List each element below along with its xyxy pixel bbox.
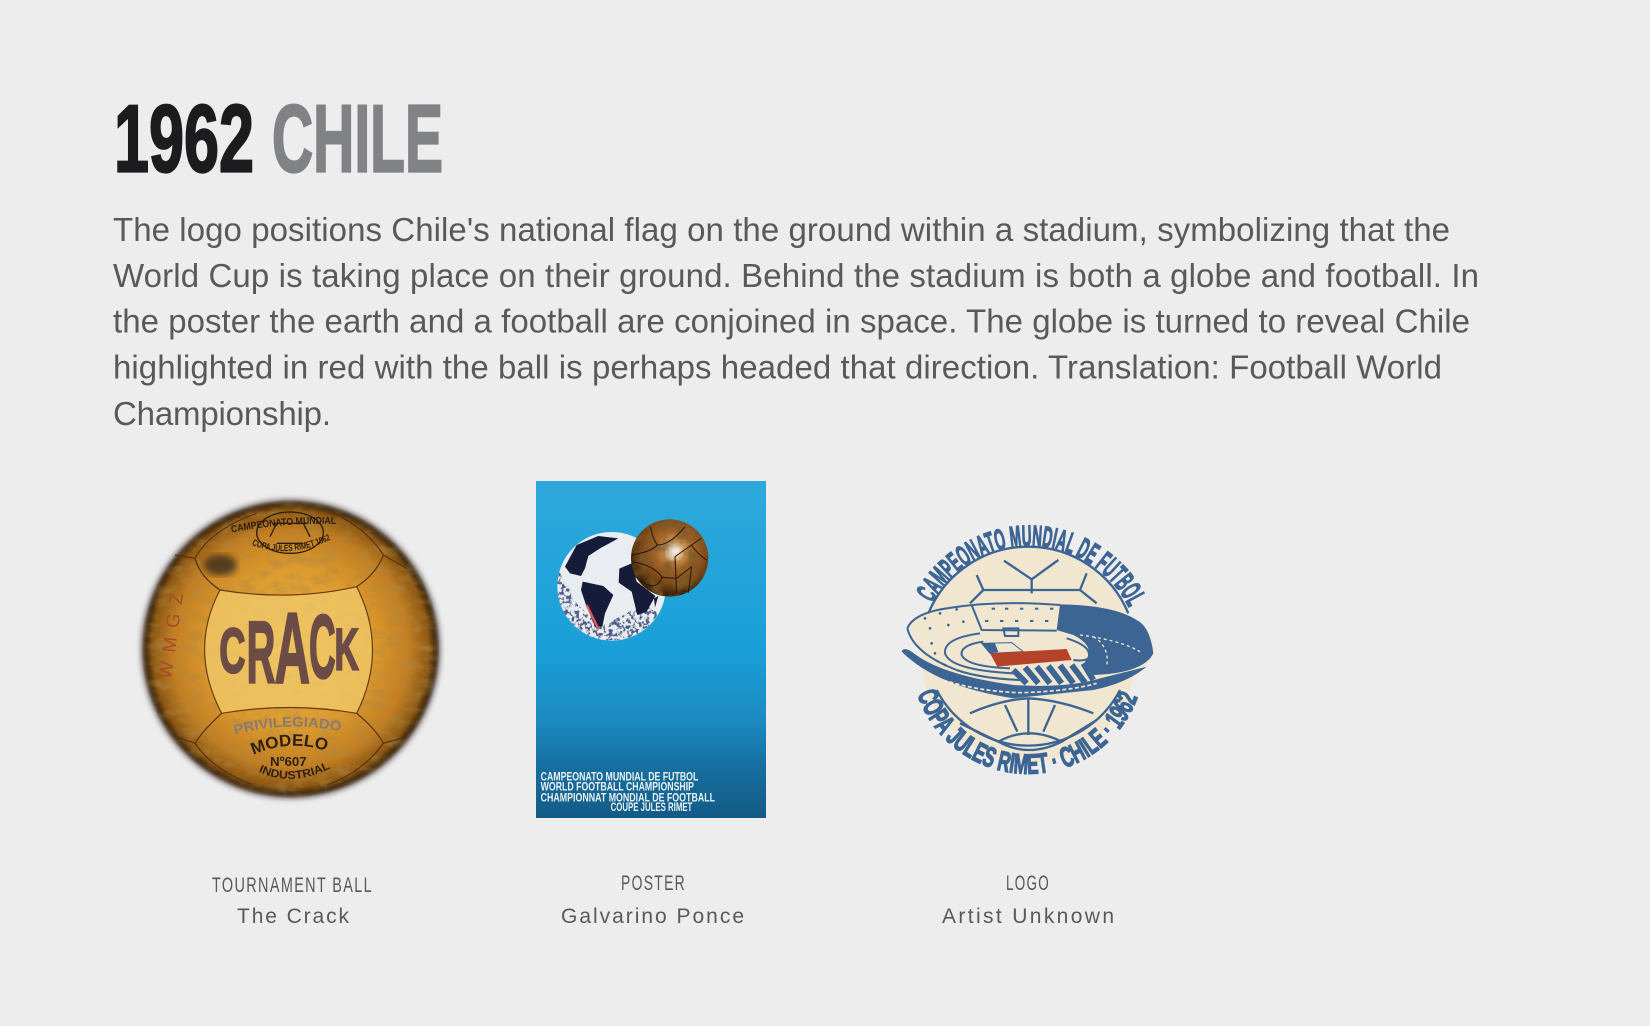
poster text: WORLD FOOTBALL CHAMPIONSHIP [541, 779, 694, 793]
logo stadium base ribbon [902, 649, 1147, 698]
caption: tournament ball [212, 874, 373, 928]
caption: logo: Artist Unknown [942, 905, 1114, 928]
description text block [113, 211, 1479, 432]
description text block: World Cup is taking place on their ground. Behind the stadium is both a globe and football. In [113, 257, 1479, 294]
logo cream ground [921, 548, 1136, 762]
ball bottom lettering: INDUSTRIAL [259, 763, 330, 779]
ball bottom lettering: PRIVILEGIADO [234, 716, 341, 734]
caption: logo: LOGO [1006, 872, 1050, 895]
title [114, 86, 443, 192]
title: CHILE [272, 86, 443, 192]
ball CRACK lettering: C [219, 617, 245, 687]
caption: tournament ball: The Crack [237, 905, 350, 928]
logo flag [982, 643, 1072, 667]
logo curved lettering: CAMPEONATO MUNDIAL DE FUTBOL [916, 524, 1145, 608]
logo stadium outline [907, 603, 1089, 680]
ball CRACK lettering: K [335, 617, 359, 682]
poster text: CHAMPIONNAT MONDIAL DE FOOTBALL [541, 790, 715, 804]
title: 1962 [114, 86, 254, 192]
description text block: Championship. [113, 395, 331, 432]
poster text [541, 770, 715, 814]
caption: logo [942, 872, 1114, 928]
description text block: the poster the earth and a football are conjoined in space. The globe is turned to reveal Chile [113, 302, 1470, 340]
infographic page: 1962 Chile [113, 103, 1477, 923]
poster text: CAMPEONATO MUNDIAL DE FUTBOL [541, 770, 698, 784]
ball CRACK lettering [219, 593, 359, 705]
ball bottom lettering [234, 716, 341, 779]
ball top lettering: CAMPEONATO MUNDIAL [231, 517, 336, 532]
logo stadium right stand [1057, 604, 1153, 675]
ball CRACK lettering: C [309, 598, 336, 698]
ball bottom lettering: MODELO [250, 734, 328, 754]
ball smudge [203, 554, 237, 576]
ball seams [175, 513, 407, 785]
logo curved lettering [916, 524, 1145, 775]
caption: poster: POSTER [621, 872, 686, 895]
caption: poster [561, 872, 744, 928]
caption: poster: Galvarino Ponce [561, 905, 744, 928]
logo seating dots [924, 608, 1053, 666]
description text block: highlighted in red with the ball is perhaps headed that direction. Translation: Football World [113, 348, 1442, 386]
caption: tournament ball: TOURNAMENT BALL [212, 874, 373, 897]
poster text: COUPE JULES RIMET [611, 800, 693, 814]
poster globe [557, 532, 666, 641]
image: tournament ball "The Crack" [137, 496, 444, 802]
ball centre panel [205, 587, 372, 713]
ball top lettering [231, 517, 336, 552]
image: tournament logo [902, 524, 1154, 775]
ball CRACK lettering: A [275, 593, 310, 705]
ball bottom lettering: Nº607 [270, 754, 307, 769]
logo globe lines [928, 547, 1128, 750]
image: poster by Galvarino Ponce [536, 481, 766, 818]
ball handwriting: W M G Z [154, 591, 187, 680]
logo curved lettering: COPA JULES RIMET · CHILE · 1962 [918, 689, 1138, 775]
ball top stamp [257, 512, 323, 553]
ball CRACK lettering: R [247, 603, 275, 702]
description text block: The logo positions Chile's national flag on the ground within a stadium, symbolizing that the [113, 211, 1450, 248]
ball top lettering: COPA JULES RIMET 1962 [252, 534, 330, 552]
poster football [631, 519, 708, 597]
